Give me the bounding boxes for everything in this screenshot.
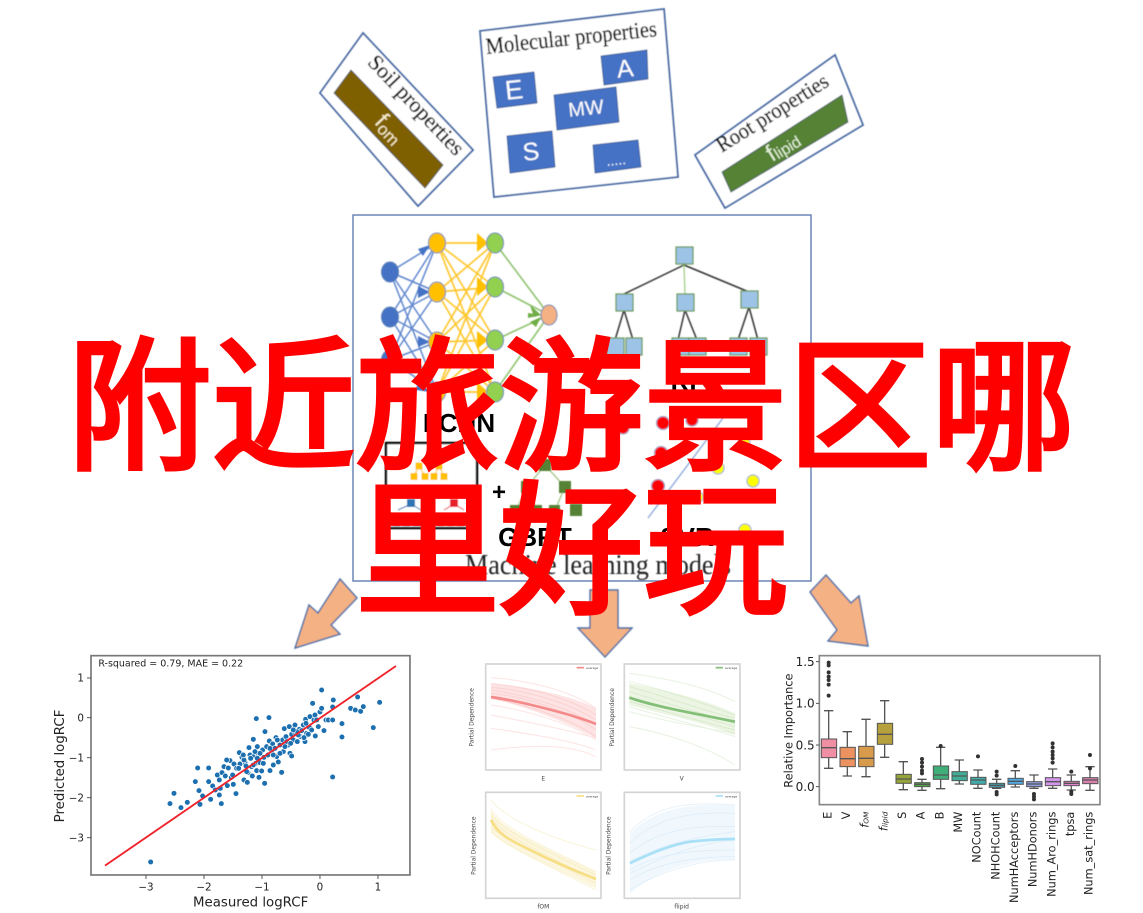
chart: relative importance box plot: 1.5: [796, 655, 815, 669]
root heading: Root properties: [711, 68, 833, 157]
decision tree RF: [607, 247, 767, 355]
chart: relative importance box plot: tpsa: [1063, 812, 1077, 836]
plot: partial dependence V: Partial Dependence: [609, 688, 616, 747]
chart: relative importance box plot: flipid: [876, 811, 890, 831]
scatter chart: measured vs predicted logRCF: Predicted logRCF: [53, 710, 68, 822]
scatter chart: measured vs predicted logRCF: −2: [69, 792, 84, 804]
chart: relative importance box plot: A: [914, 811, 928, 819]
scatter chart: measured vs predicted logRCF: Measured logRCF: [193, 896, 308, 911]
chart: relative importance box plot: 1.0: [796, 697, 815, 711]
GBRT label: GBRT: [498, 522, 572, 552]
arrow: right to box plot: [810, 575, 868, 646]
block MW: [554, 87, 619, 130]
arrow: left to scatter plot: [295, 579, 357, 648]
scatter chart: measured vs predicted logRCF: 0: [77, 712, 84, 724]
chart: relative importance box plot: [781, 655, 1100, 903]
chart: relative importance box plot: 0.0: [796, 780, 815, 794]
block E: [493, 72, 537, 108]
plot: partial dependence E: Partial Dependence: [468, 688, 475, 747]
plot: partial dependence V: V: [680, 776, 685, 783]
scatter chart: measured vs predicted logRCF: R-squared = 0.79, MAE = 0.22: [98, 658, 243, 669]
block A: [601, 50, 648, 85]
scatter chart: measured vs predicted logRCF: −3: [138, 882, 154, 894]
plot: partial dependence fOM: average: [586, 795, 598, 799]
fom bar: [334, 70, 443, 188]
flipid label: f: [761, 141, 781, 167]
plot: partial dependence V: [609, 664, 740, 783]
plot: partial dependence fOM: [470, 792, 601, 910]
chart: relative importance box plot: NumHAcceptors: [1007, 812, 1021, 903]
scatter chart: measured vs predicted logRCF: [53, 656, 410, 911]
block dots: .....: [605, 151, 627, 169]
plot: partial dependence V: average: [725, 666, 737, 670]
chart: relative importance box plot: fOM: [858, 811, 872, 828]
fom label: om: [373, 120, 403, 150]
soil heading: Soil properties: [363, 49, 470, 160]
plot: partial dependence E: E: [541, 776, 545, 783]
scatter chart: measured vs predicted logRCF: 0: [317, 882, 323, 894]
block S: [507, 131, 555, 173]
chart: relative importance box plot: E: [820, 812, 834, 819]
plot: partial dependence fOM: fOM: [537, 903, 549, 910]
chart: relative importance box plot: MW: [951, 812, 965, 833]
plot: partial dependence flipid: Partial Dependence: [606, 816, 613, 875]
panel: molecular properties: [480, 9, 678, 197]
panel: root properties: [695, 55, 863, 208]
fom label: f: [369, 109, 393, 132]
panel: soil properties: [320, 33, 473, 206]
chart: relative importance box plot: B: [932, 812, 946, 819]
scatter chart: measured vs predicted logRCF: −3: [69, 832, 84, 844]
scatter chart: measured vs predicted logRCF: 1: [375, 882, 381, 894]
plot: partial dependence flipid: flipid: [674, 903, 689, 910]
chart: relative importance box plot: NOCount: [970, 811, 984, 863]
flipid label: lipid: [771, 134, 805, 163]
SVR label: SVR: [660, 522, 714, 552]
machine learning caption: Machine learning models: [465, 550, 731, 581]
plus sign: +: [492, 479, 506, 506]
block A: A: [615, 54, 635, 84]
arrow: centre to dependence plots: [578, 590, 632, 657]
scatter chart: measured vs predicted logRCF: 1: [77, 673, 84, 685]
chart: relative importance box plot: NHOHCount: [988, 811, 1002, 880]
ensemble box: [386, 443, 477, 528]
plot: partial dependence fOM: Partial Dependence: [470, 816, 477, 875]
plot: partial dependence E: [468, 664, 601, 783]
block E: E: [503, 74, 525, 106]
chart: four partial dependence plots: [468, 664, 740, 910]
title: red overlay text: 里好玩: [355, 472, 788, 633]
block dots: [593, 140, 641, 173]
chart: relative importance box plot: 0.5: [796, 738, 815, 752]
block MW: MW: [567, 96, 605, 122]
chart: relative importance box plot: Relative Importance: [781, 674, 795, 788]
chart: relative importance box plot: S: [895, 812, 909, 819]
gradient boosted tree GBRT: [510, 459, 582, 516]
FCNN label: FCNN: [423, 408, 495, 438]
scatter chart: measured vs predicted logRCF: −1: [254, 882, 270, 894]
molecular heading: Molecular properties: [484, 16, 658, 59]
chart: relative importance box plot: Num_Aro_rings: [1044, 812, 1058, 897]
plot: partial dependence flipid: [606, 792, 740, 910]
plot: partial dependence flipid: average: [725, 795, 737, 799]
chart: relative importance box plot: NumHDonors: [1026, 812, 1040, 887]
RF label: RF: [671, 367, 705, 397]
support vector scatter SVR: [617, 414, 759, 536]
block S: S: [521, 137, 541, 167]
chart: relative importance box plot: V: [839, 811, 853, 819]
panel: machine learning models: [353, 215, 811, 581]
scatter chart: measured vs predicted logRCF: −1: [69, 752, 84, 764]
plot: partial dependence E: average: [586, 666, 598, 670]
neural network FCNN: [382, 233, 557, 402]
chart: relative importance box plot: Num_sat_rings: [1082, 812, 1096, 895]
title: red overlay text: 附近旅游景区哪: [67, 328, 1076, 489]
flipid bar: [722, 95, 848, 192]
scatter chart: measured vs predicted logRCF: −2: [196, 882, 212, 894]
